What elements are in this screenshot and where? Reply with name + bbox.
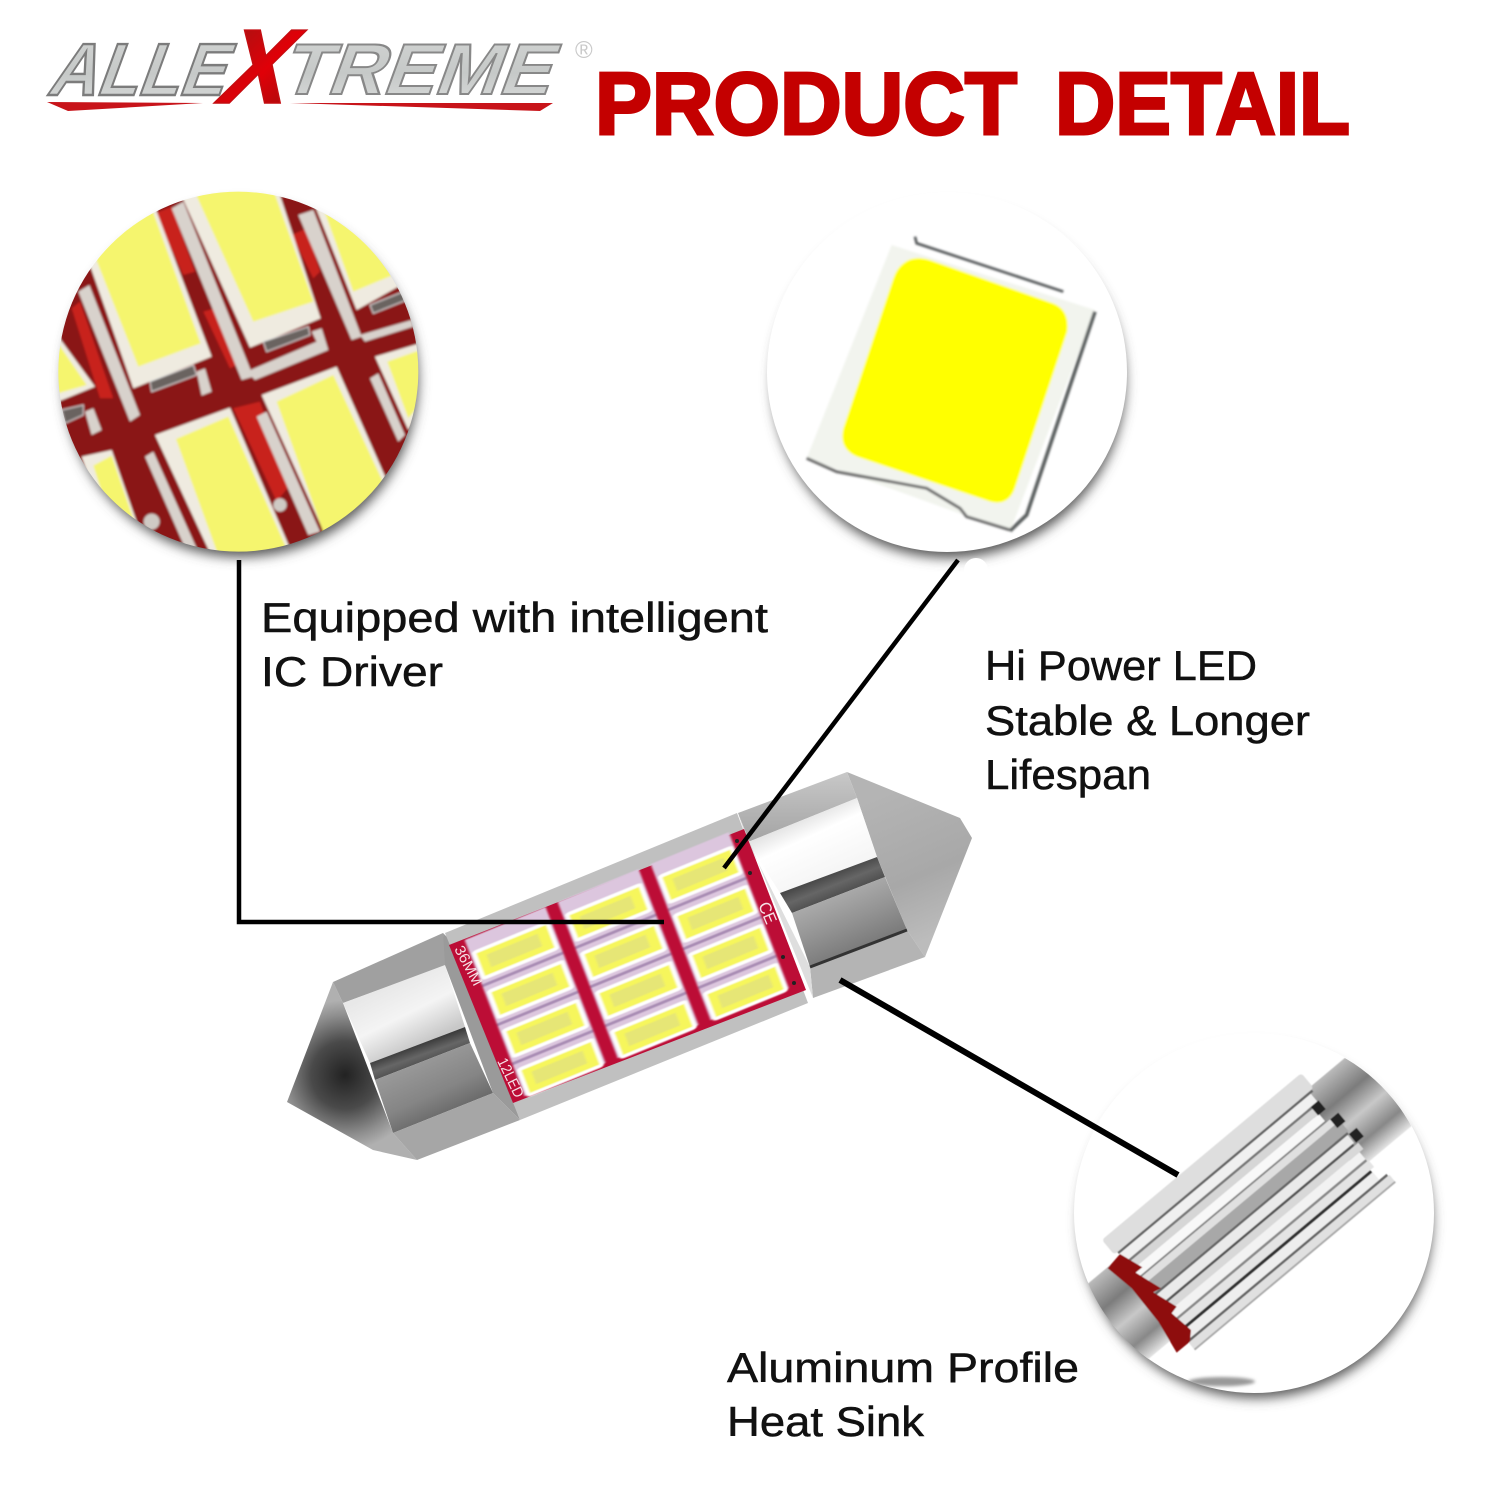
text block: hi power LED: Hi Power LED	[985, 642, 1257, 689]
tube left	[1072, 1254, 1185, 1371]
PCB label 12LED: 12LED	[493, 1055, 527, 1101]
logo registered mark: ®	[575, 37, 593, 64]
title: DETAIL	[1055, 54, 1350, 153]
PCB dots	[735, 839, 796, 985]
detail circle: aluminum heat sink	[1056, 1030, 1446, 1398]
LED bodies	[465, 832, 789, 1096]
LED bodies	[50, 185, 425, 560]
leader line: IC driver	[239, 560, 664, 922]
logo word ALLE: ALLE	[40, 29, 246, 111]
LED festoon bulb	[287, 772, 972, 1160]
LED white frames	[471, 845, 789, 1098]
bulb silver body	[445, 813, 808, 1120]
bulb red PCB	[449, 829, 806, 1103]
detail circle: hi power LED chip	[767, 192, 1127, 558]
text block: hi power LED: Lifespan	[985, 751, 1151, 798]
text block: heat sink: Aluminum Profile	[727, 1344, 1079, 1391]
LED chip body	[807, 245, 1095, 532]
LED yellow phosphor	[476, 850, 784, 1093]
logo underline left	[47, 102, 203, 111]
text block: IC driver: IC Driver	[261, 648, 443, 695]
leader line: hi power LED	[724, 560, 958, 868]
tube right	[1310, 1058, 1412, 1162]
LED row shadows	[482, 877, 777, 1065]
logo: AllExtreme	[40, 8, 593, 126]
logo letter X: X	[204, 8, 319, 126]
title	[595, 54, 1350, 153]
bulb left end cap	[287, 933, 520, 1160]
LED grid	[465, 832, 790, 1098]
chip bottom edge	[807, 458, 1010, 530]
bulb right end cap	[738, 772, 972, 998]
text block: hi power LED	[985, 642, 1310, 798]
logo word TREME: TREME	[272, 29, 572, 109]
LED dull centres	[486, 858, 773, 1084]
LED yellow phosphor	[842, 258, 1068, 503]
leader dot	[964, 558, 988, 582]
chip top contact	[915, 237, 1063, 292]
text block: heat sink: Heat Sink	[727, 1398, 925, 1445]
text block: IC driver	[261, 594, 768, 695]
PCB label 36MM: 36MM	[450, 943, 486, 989]
text block: heat sink	[727, 1344, 1079, 1445]
logo underline right	[290, 103, 553, 111]
title: PRODUCT	[595, 54, 1017, 153]
text block: hi power LED: Stable & Longer	[985, 697, 1310, 744]
red PCB end	[1108, 1254, 1191, 1353]
heat sink fins	[1102, 1073, 1314, 1255]
LED yellow phosphor	[50, 185, 425, 560]
PCB label CE: CE	[754, 899, 780, 927]
detail circle: IC driver LED close-up	[50, 185, 425, 560]
text block: IC driver: Equipped with intelligent	[261, 594, 768, 641]
chip right edge	[1010, 312, 1095, 531]
leader line: heat sink	[840, 980, 1178, 1175]
solder tabs	[62, 292, 407, 423]
